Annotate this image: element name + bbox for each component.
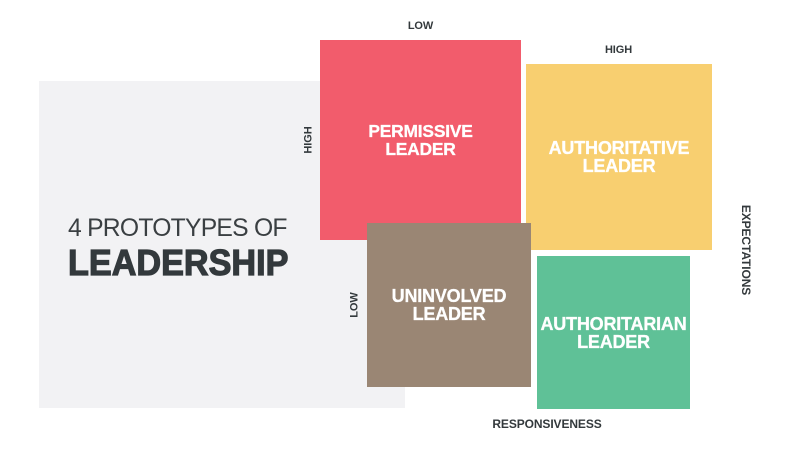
axis label: low, top: LOW — [408, 20, 433, 32]
axis label: responsiveness: RESPONSIVENESS — [492, 417, 602, 431]
quadrant: uninvolved leader — [367, 223, 531, 387]
title — [68, 215, 288, 283]
axis label: high, top right: HIGH — [605, 44, 632, 56]
quadrant: authoritative leader: AUTHORITATIVE — [549, 138, 689, 158]
quadrant: permissive leader: PERMISSIVE — [368, 121, 473, 141]
quadrant: authoritarian leader: LEADER — [577, 332, 650, 352]
title line: 4 prototypes of: 4 PROTOTYPES OF — [68, 215, 287, 242]
quadrant: authoritative leader — [526, 64, 712, 250]
quadrant: uninvolved leader: UNINVOLVED — [392, 286, 506, 306]
quadrant: authoritarian leader: AUTHORITARIAN — [540, 314, 687, 334]
axis label: expectations: EXPECTATIONS — [739, 205, 753, 295]
quadrant: authoritarian leader — [537, 256, 690, 409]
quadrant: uninvolved leader: LEADER — [413, 304, 485, 324]
axis label: high, left: HIGH — [302, 126, 314, 154]
quadrant: permissive leader: LEADER — [385, 139, 456, 159]
quadrant: authoritative leader: LEADER — [583, 156, 655, 176]
title line: leadership: LEADERSHIP — [68, 242, 288, 283]
panel: grey title background — [39, 81, 405, 408]
axis label: low, left: LOW — [348, 292, 360, 318]
quadrant: permissive leader — [320, 40, 521, 240]
